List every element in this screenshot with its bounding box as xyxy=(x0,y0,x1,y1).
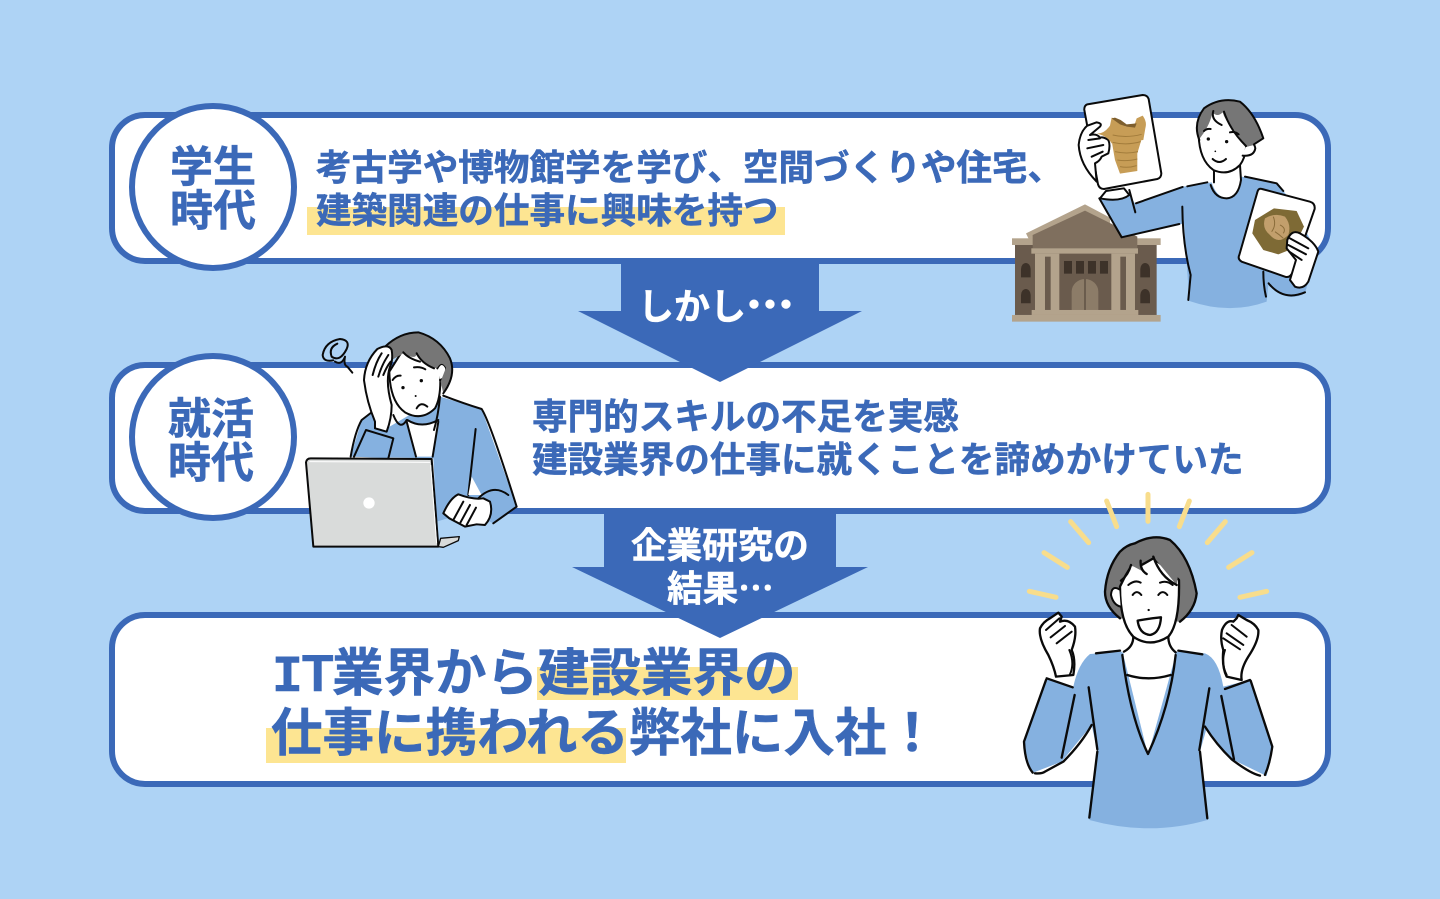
text: student days line 1: 考古学や博物館学を学び、空間づくりや住宅、 xyxy=(316,140,1063,191)
highlight: result line 1 xyxy=(537,667,798,700)
badge: student days: 時代 xyxy=(170,177,256,239)
panel: student days xyxy=(112,115,1328,261)
jacket xyxy=(1023,652,1273,828)
arrow: however xyxy=(578,258,862,382)
illustration: museum building xyxy=(1012,204,1161,322)
left hand xyxy=(1079,122,1109,182)
panel: job hunting xyxy=(112,365,1328,511)
laptop base xyxy=(438,537,459,547)
badge: job hunting: 就活 xyxy=(168,385,254,447)
neck and collar xyxy=(1213,163,1241,198)
inner shirt and neck xyxy=(1123,642,1176,755)
arrow: however: しかし xyxy=(638,278,746,330)
vessel rim xyxy=(1095,116,1146,143)
arrow: research result: 結果… xyxy=(667,561,774,612)
illustration: cheering woman xyxy=(1023,537,1273,828)
panel: result xyxy=(112,615,1328,784)
open mouth xyxy=(1138,617,1161,635)
text: result line 1: T xyxy=(302,644,333,702)
badge: student days xyxy=(132,106,294,268)
facial features xyxy=(1207,137,1210,141)
arrow: research result xyxy=(572,510,868,638)
facial features xyxy=(401,386,405,389)
arrow: research result: 企業研究の xyxy=(631,518,809,569)
laptop logo xyxy=(363,497,375,509)
hair xyxy=(1105,537,1197,622)
card with fossil xyxy=(1239,189,1315,277)
highlight: result line 2 xyxy=(266,728,626,763)
illustration: man holding artifact cards xyxy=(1079,95,1318,308)
right hand xyxy=(1287,232,1318,288)
text: result line 2: 仕事に携われる弊社に入社！ xyxy=(271,691,938,766)
laptop screen xyxy=(306,458,438,547)
squiggle xyxy=(323,339,352,373)
ear xyxy=(1243,143,1255,156)
vessel body xyxy=(1111,133,1143,174)
badge: job hunting: 時代 xyxy=(168,429,254,491)
left fist xyxy=(1040,613,1075,677)
hair xyxy=(1197,100,1263,147)
face xyxy=(1199,108,1248,172)
text: result line 1: I xyxy=(272,649,303,707)
text: result line 1: 業界から建設業界の xyxy=(332,631,796,706)
face xyxy=(389,347,440,416)
arrow: however: ･･･ xyxy=(744,284,796,328)
text: job hunting line 1: 専門的スキルの不足を実感 xyxy=(532,389,959,440)
illustration: worried woman at laptop xyxy=(306,332,517,547)
ear xyxy=(1111,588,1121,607)
highlight: student line 2 xyxy=(307,207,785,235)
badge: student days: 学生 xyxy=(170,133,256,195)
text: job hunting line 2: 建設業界の仕事に就くことを諦めかけていた xyxy=(532,432,1244,483)
lower hand xyxy=(443,494,491,527)
badge: job hunting xyxy=(132,356,294,518)
illustration: rays of joy xyxy=(1029,494,1267,597)
ear xyxy=(437,364,446,380)
hair xyxy=(385,332,452,393)
card with clay vessel xyxy=(1084,95,1161,189)
sweater xyxy=(1099,177,1317,308)
text: student days line 2: 建築関連の仕事に興味を持つ xyxy=(316,183,779,234)
right fist xyxy=(1221,615,1258,680)
raised sleeve xyxy=(354,430,393,458)
hand on head xyxy=(364,346,392,432)
blazer inner seam xyxy=(468,429,476,495)
face xyxy=(1120,558,1179,642)
eyes xyxy=(1128,581,1173,595)
inner shirt xyxy=(407,420,438,457)
blazer xyxy=(351,397,517,523)
